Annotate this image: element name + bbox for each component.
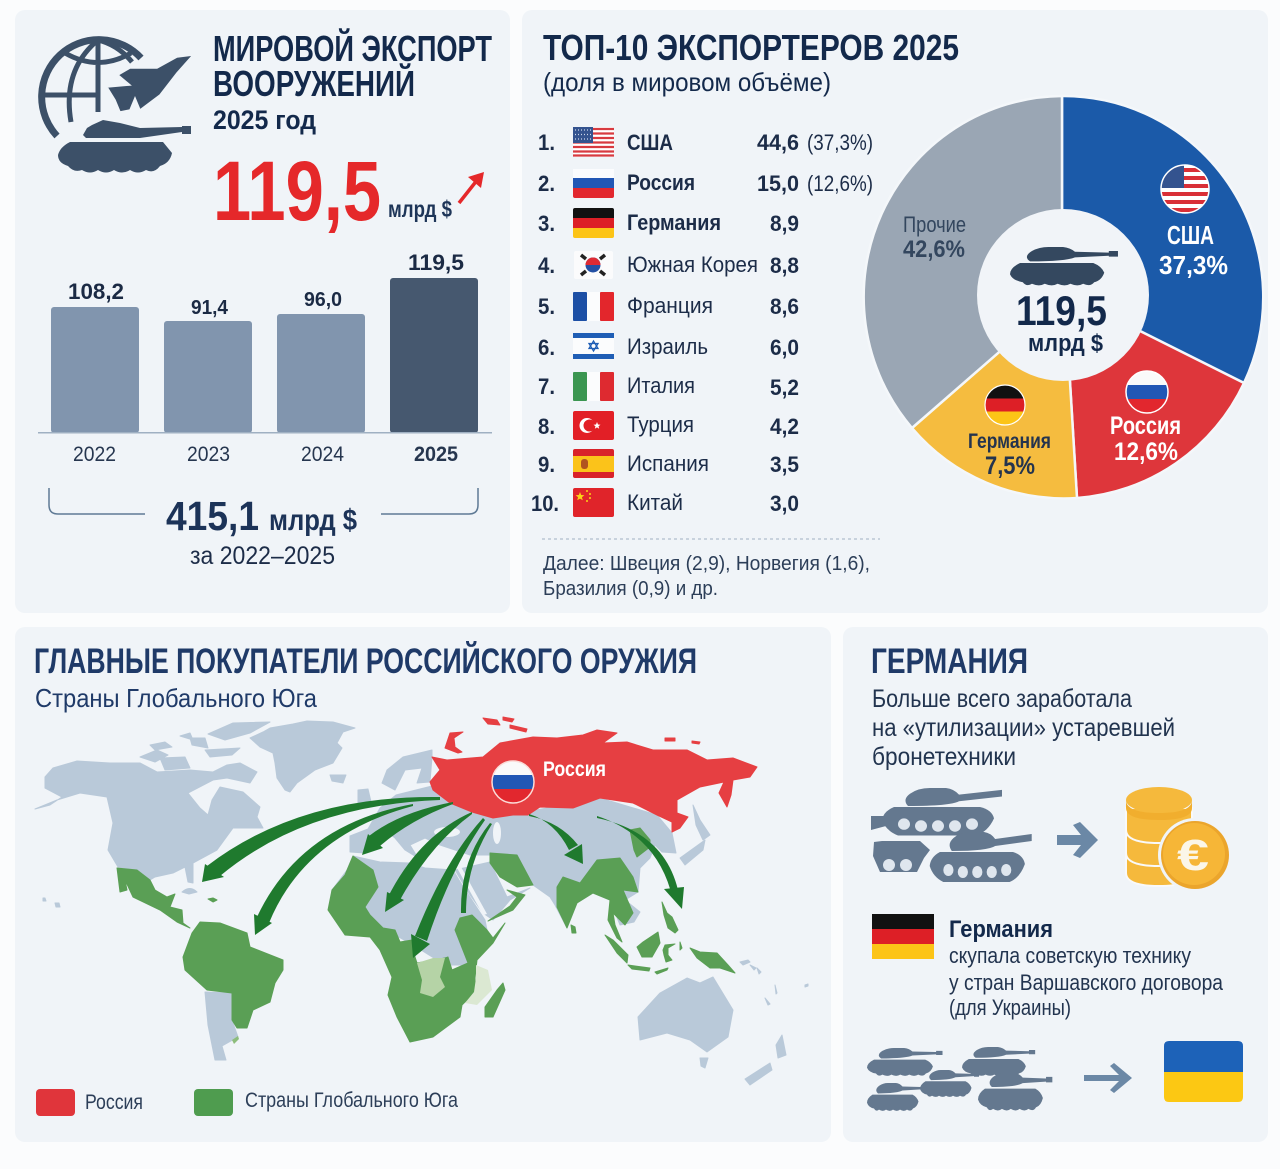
legend	[36, 1089, 458, 1116]
map label: Russia: Россия	[543, 758, 606, 781]
ranking list: 15,0	[757, 171, 799, 196]
map label: Russia	[492, 758, 606, 804]
ranking list: 6,0	[770, 335, 799, 360]
ranking list: Южная Корея	[627, 252, 758, 277]
ranking list: 9.	[538, 452, 555, 477]
ranking list: (12,6%)	[807, 171, 873, 196]
slice label: other	[903, 212, 966, 263]
ranking list: Испания	[627, 451, 709, 476]
headline value: 119,5	[213, 144, 381, 238]
slice label: other: 42,6%	[903, 236, 965, 263]
flag: Spain	[573, 449, 614, 478]
bar chart: 2022–2025: 119,5	[408, 250, 464, 275]
ranking list: 5.	[538, 294, 555, 319]
bar chart: 2022–2025	[38, 250, 492, 466]
ranking list: Германия	[627, 210, 721, 235]
arrow: scrap to euro	[1057, 822, 1098, 858]
text: Germany bought Soviet equipment	[949, 916, 1224, 1020]
text: earned the most: на «утилизации» устаревшей	[872, 714, 1175, 742]
heading: Germany: ГЕРМАНИЯ	[871, 642, 1028, 681]
ranking list: Турция	[627, 412, 694, 437]
legend: Россия	[85, 1091, 143, 1114]
text: Germany bought Soviet equipment: скупала советскую технику	[949, 943, 1191, 968]
flag: Germany	[573, 208, 614, 238]
ranking list: 3,0	[770, 491, 799, 516]
heading: world arms exports: ВООРУЖЕНИЙ	[213, 62, 415, 104]
ranking list: 8,9	[770, 211, 799, 236]
flag: Ukraine	[1164, 1041, 1243, 1102]
flag: France	[573, 292, 614, 321]
total for 2022–2025	[49, 488, 478, 570]
flag: China	[573, 488, 614, 517]
total for 2022–2025: 415,1	[166, 493, 259, 539]
heading: top 10 exporters: ТОП-10 ЭКСПОРТЕРОВ 2025	[543, 27, 959, 68]
bar chart: 2022–2025: 2024	[301, 443, 344, 466]
heading: main buyers: Страны Глобального Юга	[35, 683, 317, 713]
ranking list: 2.	[538, 171, 555, 196]
heading: world arms exports: МИРОВОЙ ЭКСПОРТ	[213, 27, 492, 69]
ranking list: Франция	[627, 293, 713, 318]
ranking list: 4,2	[770, 414, 799, 439]
slice label: Germany: 7,5%	[985, 452, 1035, 480]
ranking list: 4.	[538, 253, 555, 278]
icon: coins and euro: €	[1177, 831, 1209, 880]
slice label: Russia: 12,6%	[1114, 438, 1178, 466]
panel: top 10 exporters	[522, 10, 1268, 613]
slice label: USA: США	[1167, 220, 1214, 250]
flag: Italy	[573, 372, 614, 401]
panel: Germany	[843, 627, 1268, 1142]
heading: main buyers: ГЛАВНЫЕ ПОКУПАТЕЛИ РОССИЙСКОГО ОРУЖИЯ	[34, 641, 697, 681]
ranking list: 44,6	[757, 130, 799, 155]
slice label: USA: 37,3%	[1159, 250, 1228, 280]
ranking list: Россия	[627, 170, 695, 195]
icon: coins and euro	[1126, 787, 1232, 892]
text: Germany bought Soviet equipment: у стран Варшавского договора	[949, 970, 1224, 995]
gaps: inland seas	[434, 822, 666, 915]
flag: Turkey	[573, 411, 614, 440]
ranking list: США	[627, 130, 673, 155]
ranking list: 3.	[538, 211, 555, 236]
map: Russia	[430, 717, 757, 832]
ranking list	[531, 130, 873, 516]
total for 2022–2025: за 2022–2025	[190, 542, 335, 570]
headline value: млрд $	[388, 196, 452, 222]
map: neutral land	[35, 721, 808, 1085]
ranking list: (37,3%)	[807, 130, 873, 155]
slice label: Germany	[968, 385, 1051, 480]
text: earned the most: Больше всего заработала	[872, 685, 1132, 713]
ranking list: Китай	[627, 490, 683, 515]
ranking list: 8,6	[770, 294, 799, 319]
text: earned the most: бронетехники	[872, 743, 1016, 771]
panel: main buyers of Russian arms	[15, 627, 831, 1142]
heading: top 10 exporters: (доля в мировом объёме)	[543, 67, 831, 97]
donut centre total	[1016, 287, 1107, 357]
flag: Israel	[573, 333, 614, 359]
text: Germany bought Soviet equipment: Германия	[949, 916, 1053, 943]
flag: Germany large	[872, 914, 934, 959]
note: other exporters	[542, 539, 880, 600]
ranking list: 5,2	[770, 375, 799, 400]
ranking list: 7.	[538, 374, 555, 399]
donut centre total: млрд $	[1028, 330, 1104, 357]
slice label: Germany: Германия	[968, 430, 1051, 453]
heading: top 10 exporters	[543, 27, 959, 97]
bar chart: 2022–2025: 108,2	[68, 279, 124, 304]
world map	[35, 717, 808, 1085]
text: Germany bought Soviet equipment: (для Украины)	[949, 995, 1071, 1020]
donut chart: market shares	[864, 96, 1263, 498]
slice label: Russia	[1110, 371, 1181, 466]
bar chart: 2022–2025: 91,4	[191, 297, 229, 319]
slice label: USA	[1159, 164, 1228, 280]
map: lighter Global South areas	[232, 958, 492, 1044]
panel: world arms exports	[15, 10, 510, 613]
bar chart: 2022–2025: 96,0	[304, 289, 342, 311]
ranking list: 1.	[538, 130, 555, 155]
donut centre total: 119,5	[1016, 287, 1107, 334]
heading: world arms exports	[213, 27, 492, 135]
text: earned the most	[872, 685, 1175, 771]
map: Global South countries	[117, 828, 735, 1042]
icon: donut centre tank	[1010, 247, 1118, 285]
legend: Страны Глобального Юга	[245, 1089, 458, 1112]
bar chart: 2022–2025: 2025	[414, 443, 458, 466]
arrow: tanks to Ukraine	[1084, 1063, 1132, 1093]
arrow: growth	[459, 172, 484, 203]
slice label: other: Прочие	[903, 212, 966, 237]
bar chart: 2022–2025: 2022	[73, 443, 116, 466]
icon: Soviet tanks group	[867, 1047, 1052, 1111]
ranking list: 3,5	[770, 452, 799, 477]
note: other exporters: Далее: Швеция (2,9), Норвегия (1,6),	[543, 553, 870, 575]
flag: USA	[573, 127, 614, 157]
slice label: Russia: Россия	[1110, 412, 1181, 440]
ranking list: 6.	[538, 335, 555, 360]
icon: globe, jet and tank	[42, 40, 193, 172]
flag: South Korea	[574, 251, 613, 279]
ranking list: 8.	[538, 414, 555, 439]
ranking list: Израиль	[627, 334, 708, 359]
heading: world arms exports: 2025 год	[213, 105, 316, 135]
icon: old armoured vehicles	[871, 788, 1032, 882]
ranking list: Италия	[627, 373, 695, 398]
total for 2022–2025: млрд $	[269, 504, 357, 537]
heading: main buyers	[34, 641, 697, 713]
ranking list: 8,8	[770, 253, 799, 278]
flag: Russia	[573, 169, 614, 198]
arrows: Russia to buyers	[202, 797, 684, 958]
ranking list: 10.	[531, 491, 559, 516]
bar chart: 2022–2025: 2023	[187, 443, 230, 466]
note: other exporters: Бразилия (0,9) и др.	[543, 578, 718, 600]
